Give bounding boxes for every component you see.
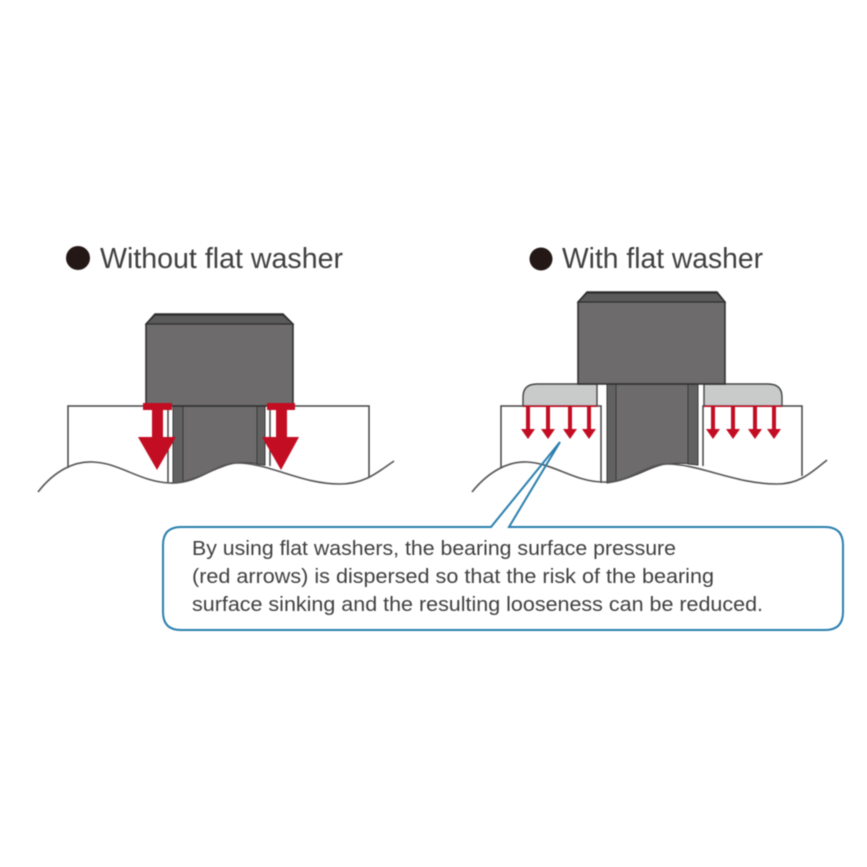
heading: with flat washer: With flat washer: [562, 243, 763, 275]
shank: [607, 384, 698, 483]
callout text: By using flat washers, the bearing surface pressure: [192, 538, 676, 560]
diagram: bolt with flat washer: [472, 292, 827, 492]
left flat washer: [523, 384, 597, 406]
callout: [163, 442, 843, 630]
callout text: surface sinking and the resulting looseness can be reduced.: [192, 594, 763, 616]
callout text: (red arrows) is dispersed so that the risk of the bearing: [192, 566, 714, 588]
left red arrow: [138, 403, 176, 470]
shank: [173, 406, 265, 483]
left and right clamped plates: [68, 406, 369, 483]
ground curve: [38, 461, 394, 492]
callout bubble with pointer: [163, 442, 843, 630]
right red arrow: [262, 403, 299, 470]
right flat washer: [704, 384, 782, 406]
diagram: bolt without flat washer: [38, 314, 394, 492]
red dispersed arrows: [521, 406, 782, 439]
clamped plates: [501, 406, 802, 483]
callout text: [192, 538, 763, 616]
bolt head: [578, 292, 725, 384]
ground curve: [472, 460, 827, 492]
heading: without flat washer: Without flat washer: [100, 243, 343, 275]
bolt head: [146, 314, 293, 406]
